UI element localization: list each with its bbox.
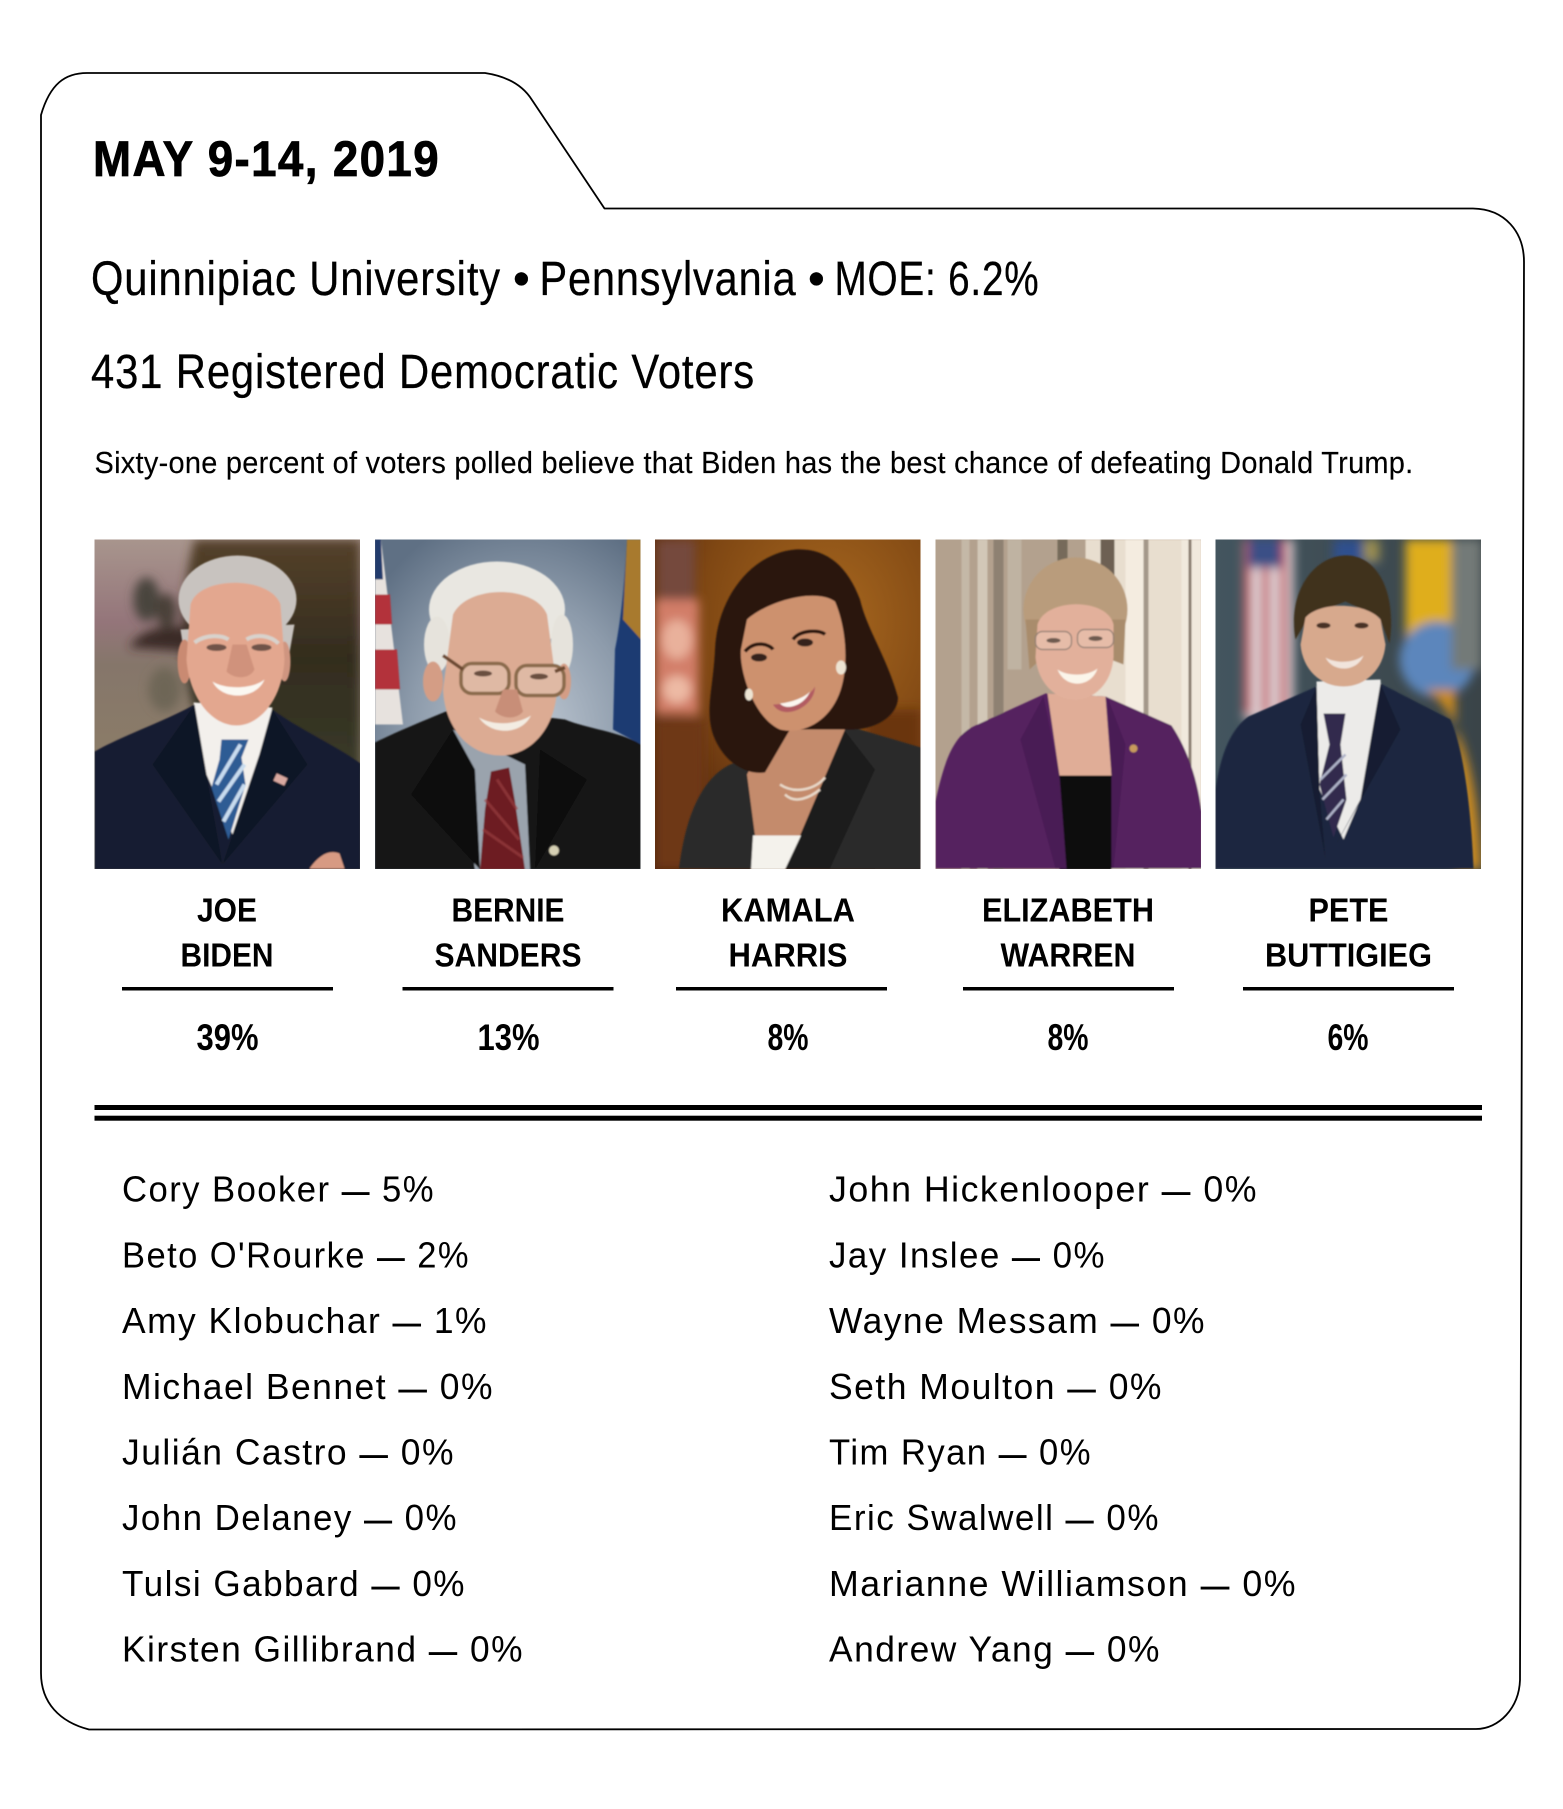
candidate name: Bernie Sanders: BERNIE [452,892,564,928]
heading: sample size: 431 Registered Democratic Voters [91,346,755,399]
candidate name: Pete Buttigieg: PETE [1308,892,1388,928]
heading: pollster, state and margin of error: • [513,253,531,306]
heading: pollster, state and margin of error: MOE: 6.2% [834,253,1040,306]
list: remaining candidates, right column: Eric Swalwell — 0% [829,1497,1160,1538]
heading: pollster, state and margin of error: Quinnipiac University [91,253,501,306]
list: remaining candidates, right column: John Hickenlooper — 0% [829,1169,1258,1210]
candidate name: Kamala Harris: KAMALA [721,892,855,928]
candidate name: Pete Buttigieg [1265,892,1432,974]
list: remaining candidates, left column: Cory Booker — 5% [122,1169,435,1210]
photo: Joe Biden [94,540,360,870]
heading: pollster, state and margin of error [91,253,1040,306]
photo: Elizabeth Warren [936,540,1202,870]
photo: Bernie Sanders [375,540,641,870]
photo: Pete Buttigieg [1216,540,1482,870]
list: remaining candidates, right column: Andrew Yang — 0% [829,1629,1161,1670]
candidate name: Joe Biden: BIDEN [180,936,274,974]
candidate name: Bernie Sanders [434,892,582,974]
percentage: Biden 39%: 39% [196,1017,258,1058]
candidate name: Pete Buttigieg: BUTTIGIEG [1265,936,1432,974]
list: remaining candidates, left column [122,1169,524,1670]
list: remaining candidates, left column: Tulsi Gabbard — 0% [122,1563,466,1604]
photo: Kamala Harris [655,540,921,870]
candidate name: Elizabeth Warren: ELIZABETH [982,892,1154,928]
list: remaining candidates, right column: Marianne Williamson — 0% [829,1563,1297,1604]
candidate name: Bernie Sanders: SANDERS [434,936,582,974]
candidate name: Joe Biden [180,892,274,974]
list: remaining candidates, right column: Seth Moulton — 0% [829,1366,1163,1407]
percentage: Buttigieg 6%: 6% [1328,1017,1368,1058]
heading: pollster, state and margin of error: Pennsylvania [540,253,796,306]
list: remaining candidates, right column: Wayne Messam — 0% [829,1300,1206,1341]
candidate name: Kamala Harris [721,892,855,974]
list: remaining candidates, left column: Julián Castro — 0% [122,1432,455,1472]
list: remaining candidates, left column: Kirsten Gillibrand — 0% [122,1629,524,1670]
candidate name: Elizabeth Warren: WARREN [1000,936,1136,974]
candidate name: Joe Biden: JOE [197,892,257,928]
list: remaining candidates, right column [829,1169,1297,1670]
list: remaining candidates, left column: John Delaney — 0% [122,1497,458,1538]
heading: pollster, state and margin of error: • [808,253,826,306]
list: remaining candidates, right column: Tim Ryan — 0% [829,1432,1092,1472]
percentage: Warren 8%: 8% [1048,1017,1088,1058]
percentage: Sanders 13%: 13% [478,1017,540,1058]
percentage: Harris 8%: 8% [768,1017,808,1058]
text block: electability note: Sixty-one percent of voters polled believe that Biden has the best chance of defeating Donald Trump. [94,445,1414,480]
list: remaining candidates, left column: Amy Klobuchar — 1% [122,1300,488,1341]
list: remaining candidates, right column: Jay Inslee — 0% [829,1234,1106,1275]
title: poll date: MAY 9-14, 2019 [93,131,440,187]
list: remaining candidates, left column: Michael Bennet — 0% [122,1366,494,1407]
list: remaining candidates, left column: Beto O'Rourke — 2% [122,1234,470,1275]
candidate name: Elizabeth Warren [982,892,1154,974]
candidate name: Kamala Harris: HARRIS [728,936,848,974]
